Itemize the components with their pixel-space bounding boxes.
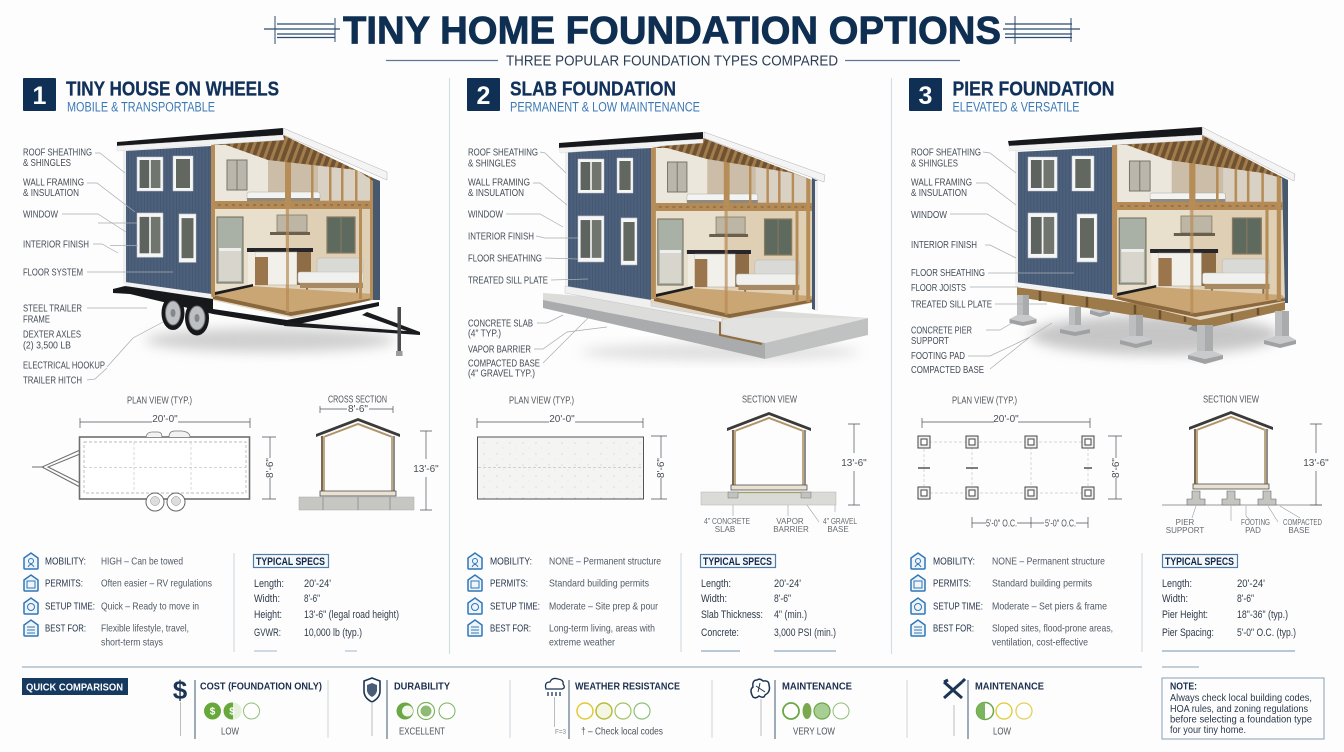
badge: quick comparison [22, 678, 128, 695]
section view: slab: SECTION VIEW [742, 394, 797, 406]
heading: option 1 [23, 78, 279, 114]
heading: option 2: 2 [477, 82, 490, 110]
section view: slab: VAPOR [776, 517, 804, 526]
metric: weather resistance: F=3 [555, 729, 566, 736]
specs table: Width: [1162, 593, 1188, 605]
plan view: piers: 8'-6" [1111, 458, 1122, 478]
specs table: 8'-6" [1237, 593, 1254, 605]
specs table: 5'-0" O.C. (typ.) [1237, 627, 1296, 639]
metric: cost: LOW [221, 726, 239, 738]
plan view: piers: PLAN VIEW (TYP.) [952, 394, 1017, 406]
icon: mobility [911, 553, 925, 569]
callout labels: wheels: WINDOW [23, 208, 58, 220]
metric: weather resistance: † – Check local codes [581, 726, 663, 738]
feature list: PERMITS: [45, 578, 83, 590]
plan view: slab [477, 394, 667, 499]
cross section: trailer [299, 394, 439, 510]
callout labels: slab: CONCRETE SLAB [468, 318, 533, 330]
feature list: MOBILITY: [933, 556, 975, 568]
callout labels: piers: CONCRETE PIER [911, 324, 972, 336]
specs table: 20'-24' [1237, 578, 1265, 590]
callout labels: wheels: ELECTRICAL HOOKUP [23, 360, 105, 372]
callout labels: slab: (4" GRAVEL TYP.) [468, 368, 535, 380]
callout labels: piers: ROOF SHEATHING [911, 146, 981, 158]
specs table: Width: [254, 593, 280, 605]
callout labels: piers: TREATED SILL PLATE [911, 298, 992, 310]
specs table: TYPICAL SPECS [1165, 556, 1234, 568]
callout labels: wheels: TRAILER HITCH [23, 374, 82, 386]
feature list: extreme weather [549, 636, 615, 648]
section view: slab: 4" CONCRETE [704, 517, 750, 526]
callout labels: wheels: & INSULATION [23, 187, 79, 199]
heading: option 2 [467, 78, 700, 114]
callout labels: piers: WINDOW [911, 209, 947, 221]
plan view: slab: PLAN VIEW (TYP.) [509, 394, 574, 406]
specs table: Length: [701, 578, 731, 590]
icon: setup time [24, 598, 38, 614]
specs table: Concrete: [701, 627, 739, 639]
callout labels: slab [468, 146, 607, 380]
section view: piers: FOOTING [1241, 518, 1270, 527]
specs table: 3,000 PSI (min.) [774, 627, 836, 639]
feature list: short-term stays [101, 636, 163, 648]
callout labels: slab: WINDOW [468, 208, 503, 220]
plan view: trailer [32, 394, 276, 511]
note box [1162, 678, 1324, 739]
illustration: house on slab [543, 127, 868, 360]
specs table: Pier Height: [1162, 609, 1208, 621]
callout labels: slab: ROOF SHEATHING [468, 146, 538, 158]
feature list: Sloped sites, flood-prone areas, [992, 622, 1113, 634]
plan view: piers: 5'-0" O.C. [1045, 518, 1076, 530]
icon: setup time [468, 598, 482, 614]
icon: blueprint lines right [1003, 16, 1080, 44]
section view: piers: BASE [1288, 526, 1310, 535]
pier: second [1060, 307, 1090, 336]
metric: maintenance low [944, 679, 1044, 739]
section view: piers [1162, 394, 1329, 535]
icon: permits [468, 575, 482, 591]
note box: before selecting a foundation type [1170, 714, 1312, 726]
panel: slab foundation [467, 78, 868, 652]
specs table: 18"-36" (typ.) [1237, 609, 1288, 621]
feature list: Standard building permits [549, 578, 649, 590]
feature list: MOBILITY: [490, 556, 532, 568]
feature list [468, 553, 661, 648]
note box: NOTE: [1170, 680, 1197, 692]
plan view: trailer: 8'-6" [265, 458, 276, 478]
callout labels: slab: VAPOR BARRIER [468, 344, 531, 356]
icon: permits [24, 575, 38, 591]
feature list: ventilation, cost-effective [992, 636, 1088, 648]
callout labels: piers: & SHINGLES [911, 158, 958, 170]
callout labels: piers: FLOOR SHEATHING [911, 267, 985, 279]
section view: piers: PIER [1176, 518, 1195, 527]
specs table: 8'-6" [774, 593, 791, 605]
metric: durability: EXCELLENT [399, 726, 445, 738]
specs table: 13'-6" (legal road height) [304, 609, 399, 621]
callout labels: wheels: ROOF SHEATHING [23, 146, 92, 158]
icon: mobility [24, 553, 38, 569]
specs table: 8'-6" [304, 593, 320, 605]
metric: durability [364, 678, 510, 739]
note box: for your tiny home. [1170, 724, 1246, 736]
section view: slab: 4" GRAVEL [823, 517, 857, 526]
feature list: Often easier – RV regulations [101, 578, 212, 590]
metric: maintenance low: LOW [993, 726, 1011, 738]
specs table: 20'-24' [304, 578, 331, 590]
callout labels: wheels: WALL FRAMING [23, 176, 84, 188]
panel: pier foundation [909, 78, 1329, 652]
feature list: MOBILITY: [45, 556, 86, 568]
specs table: GVWR: [254, 627, 281, 639]
section view: piers: 13'-6" [1303, 458, 1329, 469]
specs table: Height: [254, 609, 282, 621]
feature list: Standard building permits [992, 578, 1092, 590]
callout labels: wheels: INTERIOR FINISH [23, 238, 89, 250]
specs table: Length: [254, 578, 284, 590]
heading: option 3: PIER FOUNDATION [952, 78, 1114, 100]
column dividers [450, 78, 892, 654]
metric: durability: DURABILITY [394, 680, 450, 692]
cross section: trailer: 8'-6" [348, 404, 368, 415]
plan view: trailer: 20'-0" [152, 414, 178, 425]
feature list: SETUP TIME: [933, 600, 983, 612]
callout labels: slab: COMPACTED BASE [468, 358, 540, 370]
callout labels: slab: WALL FRAMING [468, 176, 530, 188]
callout labels: slab: (4" TYP.) [468, 328, 501, 340]
heading: option 1: TINY HOUSE ON WHEELS [66, 78, 279, 100]
feature list: BEST FOR: [933, 622, 974, 634]
illustration: house on piers [1008, 126, 1296, 364]
subtitle: THREE POPULAR FOUNDATION TYPES COMPARED [506, 52, 838, 70]
feature list: BEST FOR: [45, 622, 86, 634]
icon: setup time [911, 598, 925, 614]
metric: maintenance very low: MAINTENANCE [782, 680, 852, 692]
feature list: Flexible lifestyle, travel, [101, 622, 189, 634]
heading: option 1: 1 [33, 82, 47, 110]
callout labels: wheels [23, 146, 173, 386]
callout labels: piers: FLOOR JOISTS [911, 282, 966, 294]
section view: piers: SECTION VIEW [1203, 394, 1259, 406]
pier: back [1090, 300, 1206, 332]
specs table: 4" (min.) [774, 609, 807, 621]
specs table [234, 553, 399, 652]
icon: best for [911, 620, 925, 636]
metric: cost: $ [210, 706, 216, 718]
pier: front left [1010, 295, 1036, 326]
callout labels: piers: & INSULATION [911, 187, 967, 199]
pier: third [1120, 315, 1152, 348]
feature list [24, 553, 212, 648]
icon: best for [24, 620, 38, 636]
callout labels: wheels: DEXTER AXLES [23, 328, 81, 340]
note box: HOA rules, and zoning regulations [1170, 703, 1308, 715]
heading: option 3 [909, 78, 1114, 114]
feature list: BEST FOR: [490, 622, 531, 634]
callout labels: slab: TREATED SILL PLATE [468, 274, 548, 286]
metric: cost: COST (FOUNDATION ONLY) [200, 680, 322, 692]
metric: weather resistance [546, 678, 712, 739]
feature list: NONE – Permanent structure [992, 556, 1105, 568]
cross section: trailer: 13'-6" [413, 464, 439, 475]
section view: slab: BARRIER [773, 525, 809, 534]
plan view: trailer: PLAN VIEW (TYP.) [127, 394, 192, 406]
metric: maintenance low: MAINTENANCE [975, 680, 1044, 692]
heading: option 2: PERMANENT & LOW MAINTENANCE [510, 100, 700, 114]
feature list: Moderate – Set piers & frame [992, 600, 1107, 612]
specs table: Width: [701, 593, 727, 605]
callout labels: piers: INTERIOR FINISH [911, 239, 977, 251]
specs table: 10,000 lb (typ.) [304, 627, 362, 639]
section view: slab [701, 394, 867, 534]
badge: quick comparison: QUICK COMPARISON [26, 682, 123, 694]
callout labels: wheels: FRAME [23, 314, 50, 326]
callout labels: slab: FLOOR SHEATHING [468, 252, 542, 264]
feature list: Moderate – Site prep & pour [549, 600, 658, 612]
specs table: Slab Thickness: [701, 609, 763, 621]
metric: cost: $ [229, 706, 235, 718]
feature list: SETUP TIME: [45, 600, 95, 612]
feature list: PERMITS: [490, 578, 528, 590]
heading: option 3: 3 [919, 82, 932, 110]
specs table: 20'-24' [774, 578, 801, 590]
quick comparison strip [22, 667, 1324, 739]
plan view: piers: 20'-0" [993, 414, 1019, 425]
section view: slab: 13'-6" [841, 458, 867, 469]
metric: maintenance very low: VERY LOW [793, 726, 835, 738]
icon: permits [911, 575, 925, 591]
section view: slab: BASE [827, 525, 849, 534]
section view: piers: SUPPORT [1166, 526, 1204, 535]
callout labels: slab: & INSULATION [468, 187, 524, 199]
note box: Always check local building codes, [1170, 692, 1312, 704]
feature list [911, 553, 1113, 648]
feature list: HIGH – Can be towed [101, 556, 183, 568]
callout labels: piers [911, 146, 1074, 376]
icon: mobility [468, 553, 482, 569]
callout labels: slab: & SHINGLES [468, 158, 516, 170]
plan view: piers: 5'-0" O.C. [986, 518, 1017, 530]
plan view: slab: 20'-0" [549, 414, 575, 425]
callout labels: piers: FOOTING PAD [911, 350, 965, 362]
feature list: SETUP TIME: [490, 600, 540, 612]
plan view: slab: 8'-6" [656, 458, 667, 478]
pier: front corner [1188, 325, 1223, 364]
plan view: piers [918, 394, 1122, 530]
cross section: trailer: CROSS SECTION [328, 394, 387, 406]
pier: right [1264, 311, 1296, 348]
specs table: TYPICAL SPECS [703, 556, 772, 568]
callout labels: wheels: & SHINGLES [23, 157, 71, 169]
callout labels: piers: COMPACTED BASE [911, 364, 984, 376]
callout labels: wheels: (2) 3,500 LB [23, 340, 71, 352]
specs table [1142, 553, 1296, 652]
icon: best for [468, 620, 482, 636]
metric: cost [173, 675, 328, 739]
metric: cost: $ [173, 675, 188, 705]
section view: slab: SLAB [715, 525, 735, 534]
panel: tiny house on wheels [23, 78, 439, 652]
metric: maintenance very low [751, 679, 907, 739]
heading: option 3: ELEVATED & VERSATILE [952, 100, 1080, 114]
section view: piers: COMPACTED [1283, 518, 1322, 527]
feature list: PERMITS: [933, 578, 971, 590]
title: TINY HOME FOUNDATION OPTIONS [343, 10, 1001, 52]
callout labels: slab: INTERIOR FINISH [468, 230, 534, 242]
callout labels: wheels: FLOOR SYSTEM [23, 266, 83, 278]
feature list: Quick – Ready to move in [101, 600, 199, 612]
illustration: house on trailer [113, 125, 420, 356]
specs table: Pier Spacing: [1162, 627, 1214, 639]
specs table: TYPICAL SPECS [256, 556, 325, 568]
callout labels: wheels: STEEL TRAILER [23, 302, 82, 314]
callout labels: piers: WALL FRAMING [911, 176, 972, 188]
metric: weather resistance: WEATHER RESISTANCE [575, 680, 680, 692]
callout labels: piers: SUPPORT [911, 335, 949, 347]
section view: piers: PAD [1245, 526, 1261, 535]
specs table [681, 553, 836, 652]
feature list: Long-term living, areas with [549, 622, 655, 634]
icon: blueprint lines left [264, 16, 340, 44]
feature list: NONE – Permanent structure [549, 556, 661, 568]
specs table: Length: [1162, 578, 1192, 590]
heading: option 1: MOBILE & TRANSPORTABLE [67, 100, 215, 114]
heading: option 2: SLAB FOUNDATION [510, 78, 676, 100]
